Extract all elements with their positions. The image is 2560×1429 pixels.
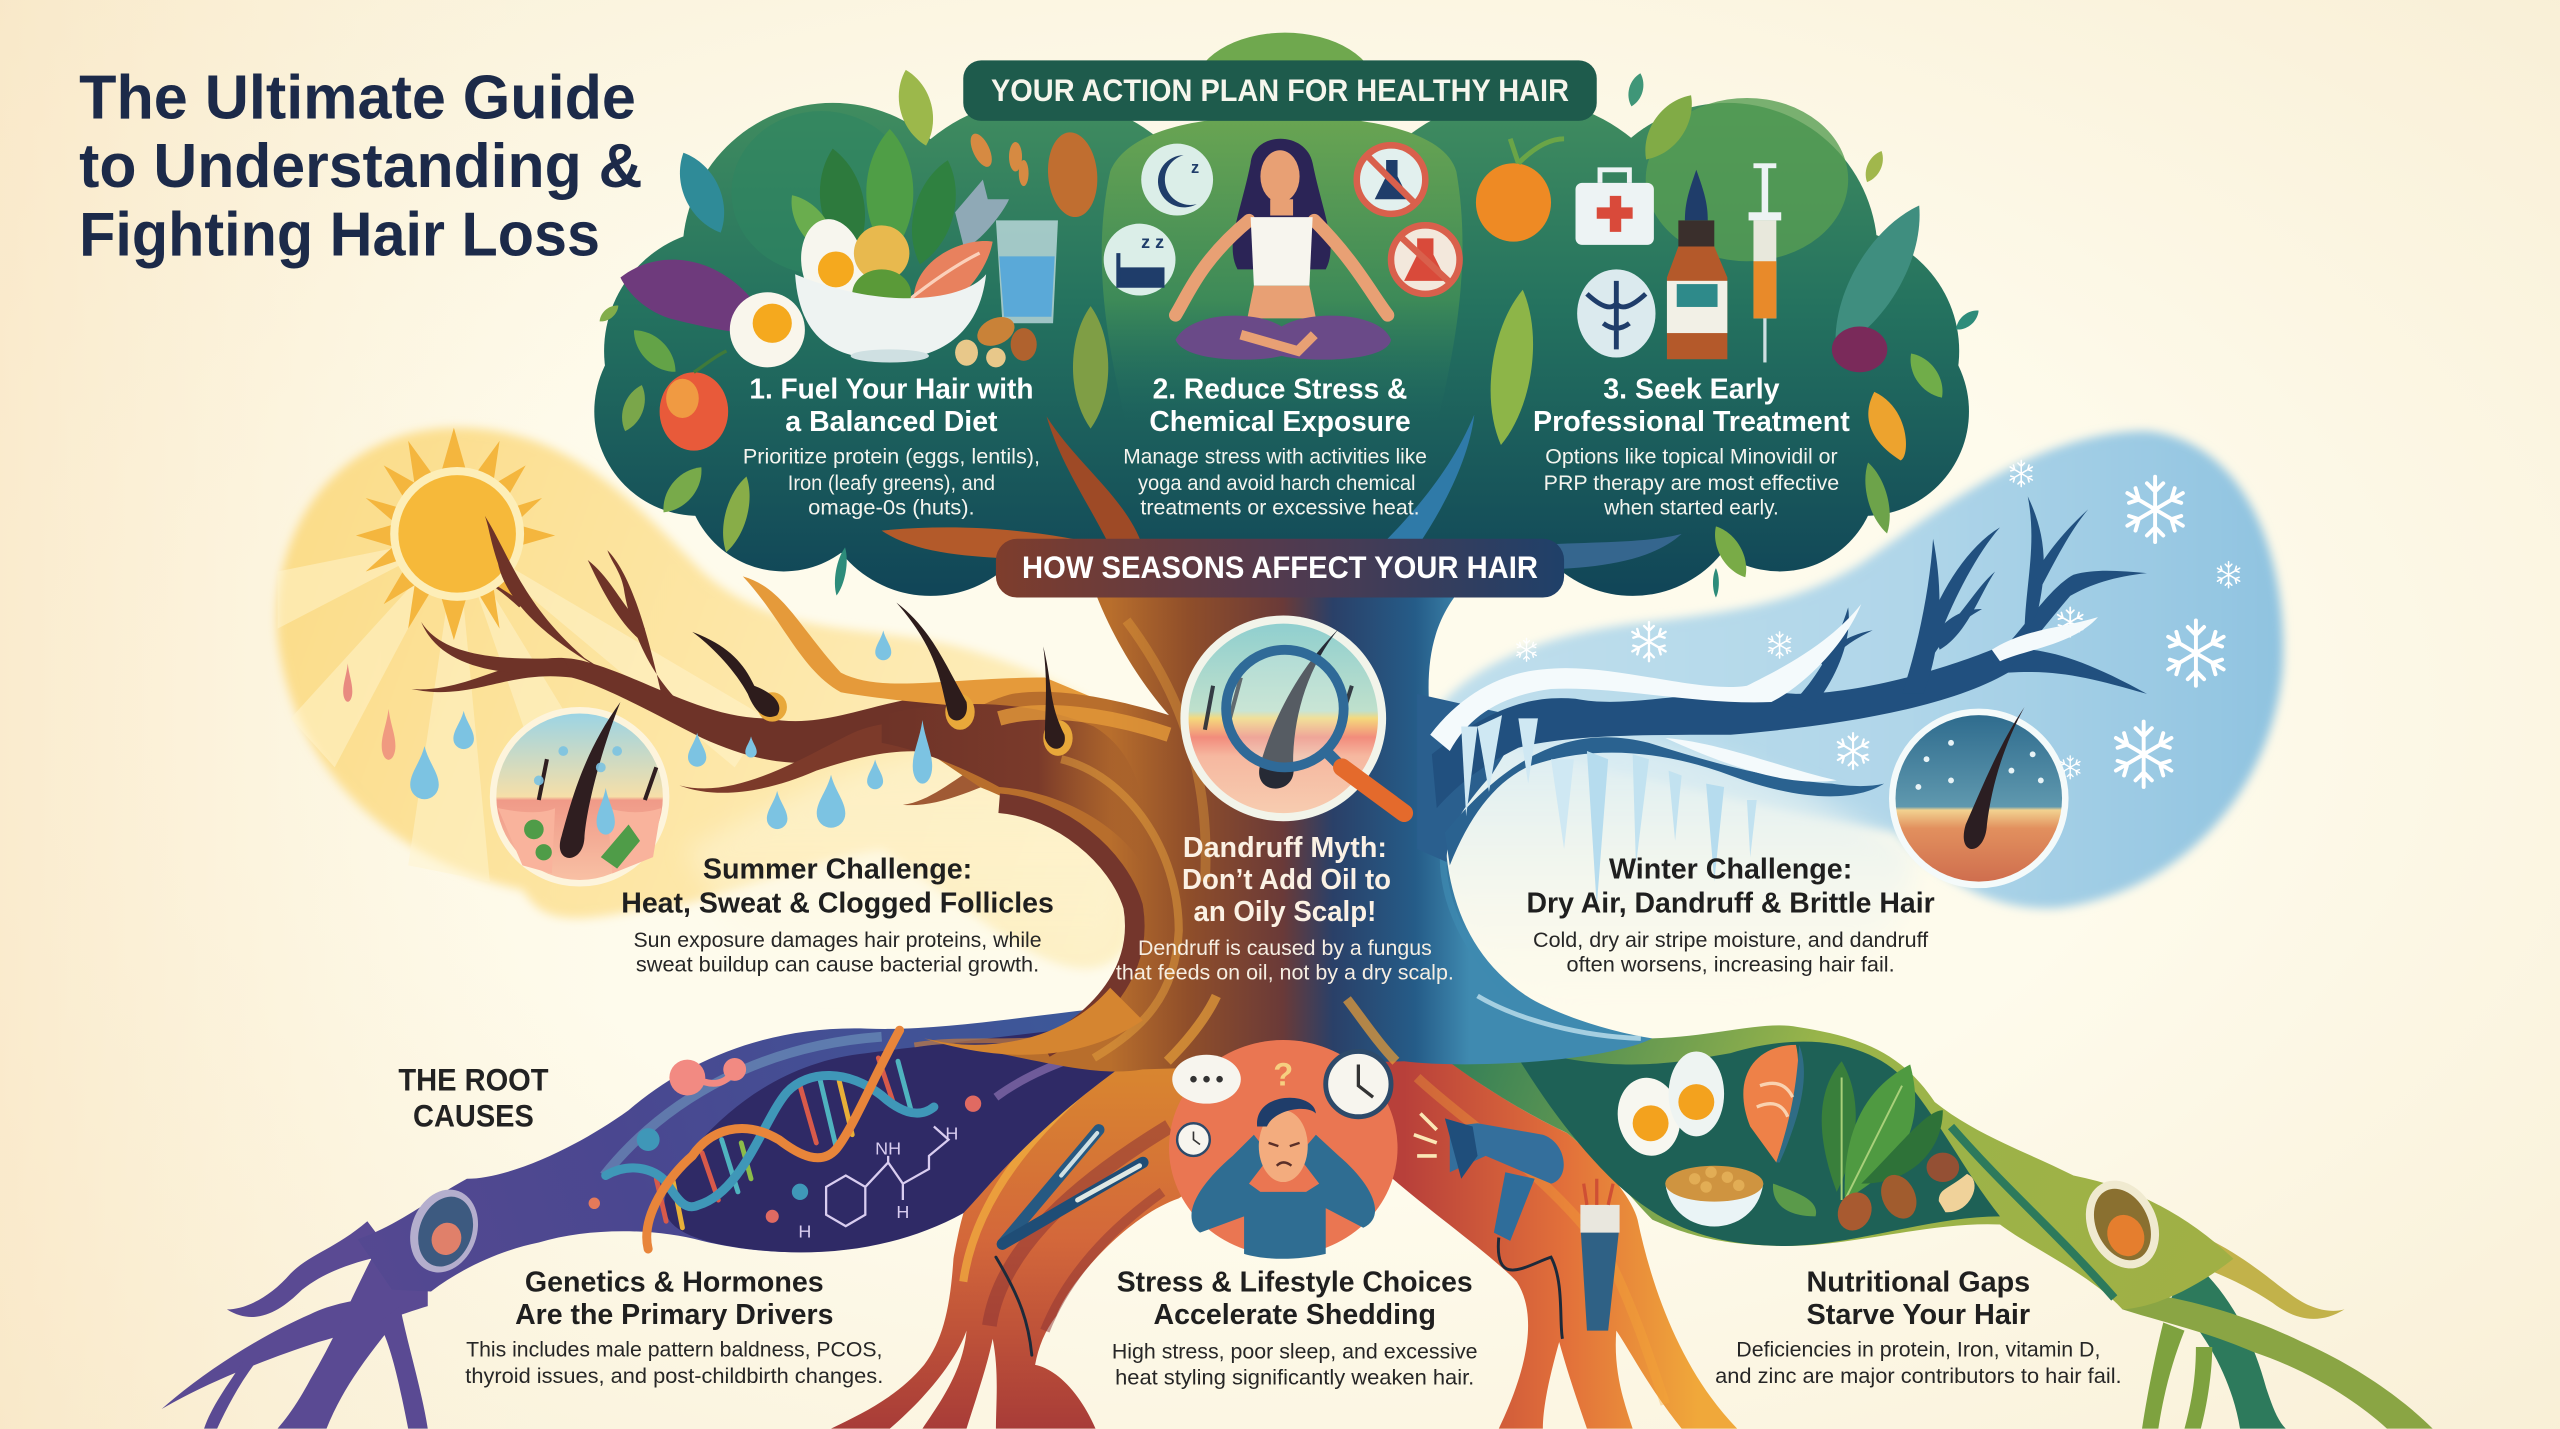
icon: magnifier scalp circle (1180, 616, 1404, 821)
text: summer challenge: Summer Challenge: (703, 853, 972, 885)
icon: winter scalp circle (1889, 707, 2069, 888)
text: step 2 stress: 2. Reduce Stress & (1153, 373, 1407, 405)
icon: moon and sleep badges: z z (1141, 232, 1164, 252)
text: step 3 treatment: Options like topical Minovidil or (1545, 446, 1838, 469)
text: summer challenge (621, 853, 1054, 976)
text: dandruff myth: Don’t Add Oil to (1182, 864, 1391, 896)
icon: flat iron (996, 1130, 1143, 1355)
icon: comb (1580, 1179, 1620, 1331)
text: nutrition: Nutritional Gaps (1807, 1266, 2030, 1298)
icon: meditating woman (1176, 139, 1391, 360)
text: step 3 treatment: when started early. (1603, 496, 1779, 519)
summer hair follicles (692, 602, 1073, 756)
summer branch (411, 550, 1169, 833)
snow and icicles (1430, 604, 2098, 782)
icon: prohibited chemicals badges (1357, 145, 1460, 294)
icon: food bowl (781, 129, 1009, 362)
title: to Understanding & (79, 132, 642, 201)
title (79, 63, 642, 270)
pill: seasons heading: HOW SEASONS AFFECT YOUR HAIR (1022, 550, 1538, 585)
icon: purple leaf (620, 260, 776, 335)
icon: orange fruit (1476, 139, 1564, 242)
icon: eggs (1612, 1051, 1724, 1161)
text: step 1 diet: a Balanced Diet (785, 406, 998, 438)
text: step 3 treatment: PRP therapy are most effective (1544, 472, 1839, 495)
text: dandruff myth: an Oily Scalp! (1193, 896, 1376, 928)
text: stress: heat styling significantly weaken hair. (1115, 1366, 1474, 1389)
root: purple genetics (162, 999, 1184, 1429)
text: dandruff myth: that feeds on oil, not by a dry scalp. (1116, 962, 1454, 985)
icon: hormone molecule: H (945, 1124, 958, 1144)
text: genetics: Are the Primary Drivers (515, 1299, 833, 1331)
root: green nutrition (1376, 999, 2433, 1429)
text: winter challenge: often worsens, increasing hair fail. (1567, 953, 1895, 976)
main limb (411, 658, 1169, 833)
icon: water glass (996, 220, 1058, 323)
text: nutrition: and zinc are major contributors to hair fail. (1715, 1365, 2122, 1388)
icon: moon and sleep badges (1104, 144, 1213, 296)
text: step 1 diet (743, 373, 1040, 519)
text: the root causes label: CAUSES (413, 1099, 534, 1134)
text: step 2 stress: treatments or excessive heat. (1140, 496, 1420, 519)
text: genetics (465, 1266, 883, 1388)
decorative leaves (596, 66, 1982, 598)
icon: stressed person circle (1169, 1040, 1398, 1259)
icon: first aid kit (1576, 170, 1654, 245)
text: winter challenge: Cold, dry air stripe moisture, and dandruff (1533, 929, 1928, 952)
icon: sun (356, 428, 607, 673)
text: summer challenge: sweat buildup can cause bacterial growth. (636, 953, 1039, 976)
text: step 1 diet: Prioritize protein (eggs, lentils), (743, 446, 1040, 469)
icon: summer scalp circle (490, 702, 669, 887)
trunk limbs in canopy (882, 415, 1682, 569)
text: step 1 diet: omage-0s (huts). (808, 496, 975, 519)
text: winter challenge (1527, 853, 1935, 976)
text: the root causes label (398, 1063, 549, 1134)
icon: hormone molecule: H (896, 1202, 909, 1222)
text: winter challenge: Dry Air, Dandruff & Brittle Hair (1527, 888, 1935, 920)
text: step 3 treatment: 3. Seek Early (1603, 373, 1780, 405)
text: nutrition (1715, 1266, 2122, 1388)
text: nutrition: Starve Your Hair (1807, 1299, 2030, 1331)
text: winter challenge: Winter Challenge: (1609, 853, 1852, 885)
text: step 3 treatment (1533, 373, 1850, 519)
limb blending into trunk (882, 704, 1145, 865)
icon: spinach leaves (1822, 1061, 1943, 1200)
icon: hair dryer (1414, 1113, 1564, 1339)
icon: nutrient oval (2072, 1169, 2173, 1280)
panel: summer swoosh background (277, 428, 1176, 1027)
title: The Ultimate Guide (79, 63, 636, 132)
text: stress (1112, 1266, 1478, 1390)
icon: hormone molecule (798, 1124, 958, 1242)
icon: follicle oval (399, 1180, 489, 1282)
tree trunk (882, 580, 1652, 1072)
text: the root causes label: THE ROOT (398, 1063, 549, 1098)
text: stress: Stress & Lifestyle Choices (1117, 1266, 1473, 1298)
icon: dropper bottle (1667, 170, 1727, 359)
text: genetics: thyroid issues, and post-childbirth changes. (465, 1365, 883, 1388)
text: genetics: Genetics & Hormones (525, 1266, 824, 1298)
icon: egg slice, nuts, almond (730, 130, 1101, 367)
text: step 1 diet: 1. Fuel Your Hair with (749, 373, 1033, 405)
icon: hormone molecule: H (798, 1222, 811, 1242)
icon: caduceus badge (1577, 269, 1656, 358)
title: Fighting Hair Loss (79, 201, 600, 270)
winter branch (1417, 496, 2147, 906)
text: summer challenge: Sun exposure damages hair proteins, while (633, 929, 1042, 952)
icon: hormone molecule: NH (875, 1138, 901, 1158)
text: step 2 stress (1123, 373, 1427, 519)
pill: seasons heading (996, 539, 1564, 598)
text: stress: High stress, poor sleep, and excessive (1112, 1340, 1478, 1363)
panel: winter swoosh background (1420, 431, 2283, 1028)
pill: action plan heading: YOUR ACTION PLAN FOR HEALTHY HAIR (991, 73, 1569, 108)
purple root strands (162, 1221, 428, 1429)
text: dandruff myth: Dendruff is caused by a fungus (1138, 937, 1432, 960)
icon: syringe (1749, 163, 1781, 362)
text: step 2 stress: yoga and avoid harch chemical (1138, 472, 1416, 495)
icon: plum and mango (1832, 327, 1906, 460)
text: step 1 diet: Iron (leafy greens), and (788, 472, 995, 495)
green root strands (2122, 1241, 2433, 1429)
icon: stressed person circle: ? (1273, 1056, 1293, 1093)
icon: lentil bowl (1665, 1166, 1763, 1227)
text: stress: Accelerate Shedding (1153, 1299, 1436, 1331)
icon: nuts (1773, 1153, 1970, 1236)
text: nutrition: Deficiencies in protein, Iron, vitamin D, (1736, 1339, 2100, 1362)
text: dandruff myth (1116, 832, 1454, 985)
text: step 2 stress: Chemical Exposure (1149, 406, 1411, 438)
icon: moon and sleep badges: z (1191, 159, 1199, 177)
pill: action plan heading (963, 60, 1597, 121)
icon: salmon (1743, 1045, 1804, 1162)
sun branches over sun (485, 516, 607, 673)
text: step 3 treatment: Professional Treatment (1533, 406, 1850, 438)
panel: canopy (594, 33, 1969, 596)
icon: DNA helix (606, 1030, 934, 1249)
root: orange central strands (831, 996, 1737, 1429)
text: step 2 stress: Manage stress with activities like (1123, 446, 1427, 469)
text: summer challenge: Heat, Sweat & Clogged Follicles (621, 888, 1054, 920)
icon: apple (660, 351, 728, 451)
icon: water drops (343, 631, 932, 829)
text: dandruff myth: Dandruff Myth: (1183, 832, 1387, 864)
text: genetics: This includes male pattern baldness, PCOS, (466, 1339, 882, 1362)
